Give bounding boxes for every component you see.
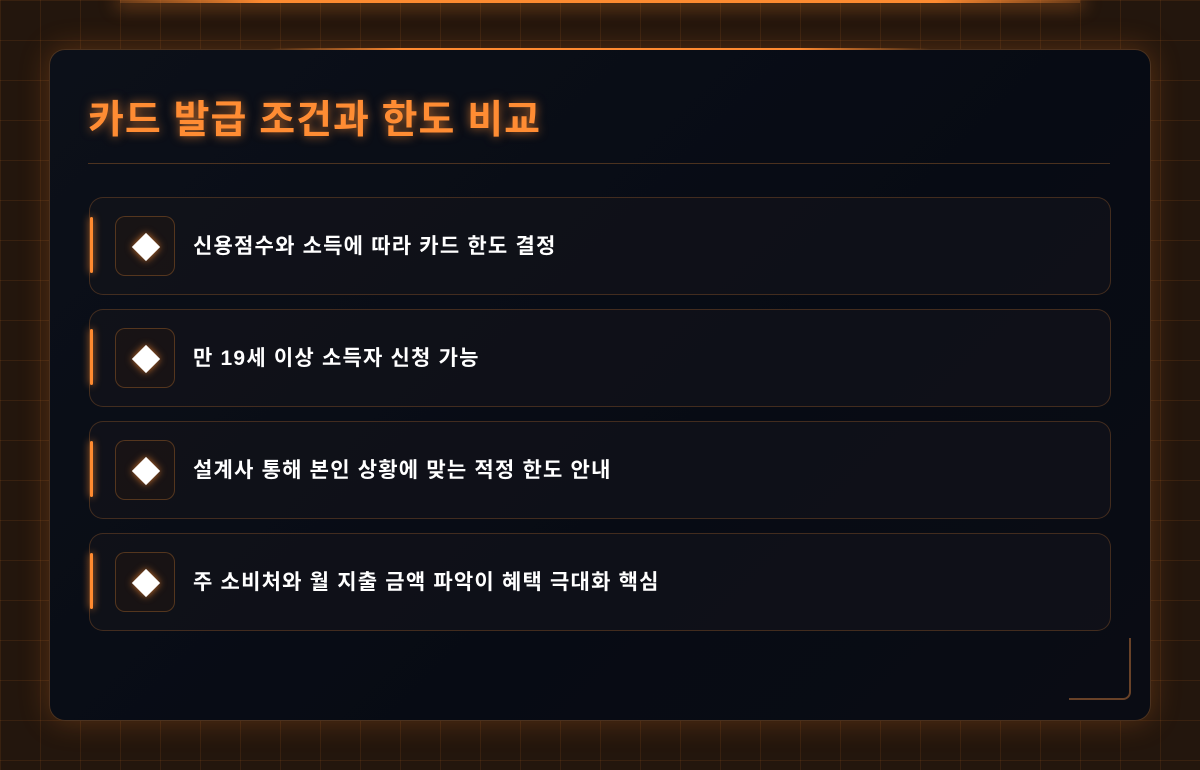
- icon: diamond: [115, 440, 175, 500]
- icon: diamond: [115, 552, 175, 612]
- title: 카드 발급 조건과 한도 비교: [88, 99, 541, 142]
- text: 만 19세 이상 소득자 신청 가능: [193, 347, 480, 370]
- item 2: [89, 309, 1111, 407]
- text: 주 소비처와 월 지출 금액 파악이 혜택 극대화 핵심: [193, 571, 660, 594]
- text: 신용점수와 소득에 따라 카드 한도 결정: [193, 235, 556, 258]
- item 4: [89, 533, 1111, 631]
- text: 설계사 통해 본인 상황에 맞는 적정 한도 안내: [193, 459, 612, 482]
- item 1: [89, 197, 1111, 295]
- item 3: [89, 421, 1111, 519]
- icon: diamond: [115, 216, 175, 276]
- icon: diamond: [115, 328, 175, 388]
- corner bracket: [1069, 638, 1131, 700]
